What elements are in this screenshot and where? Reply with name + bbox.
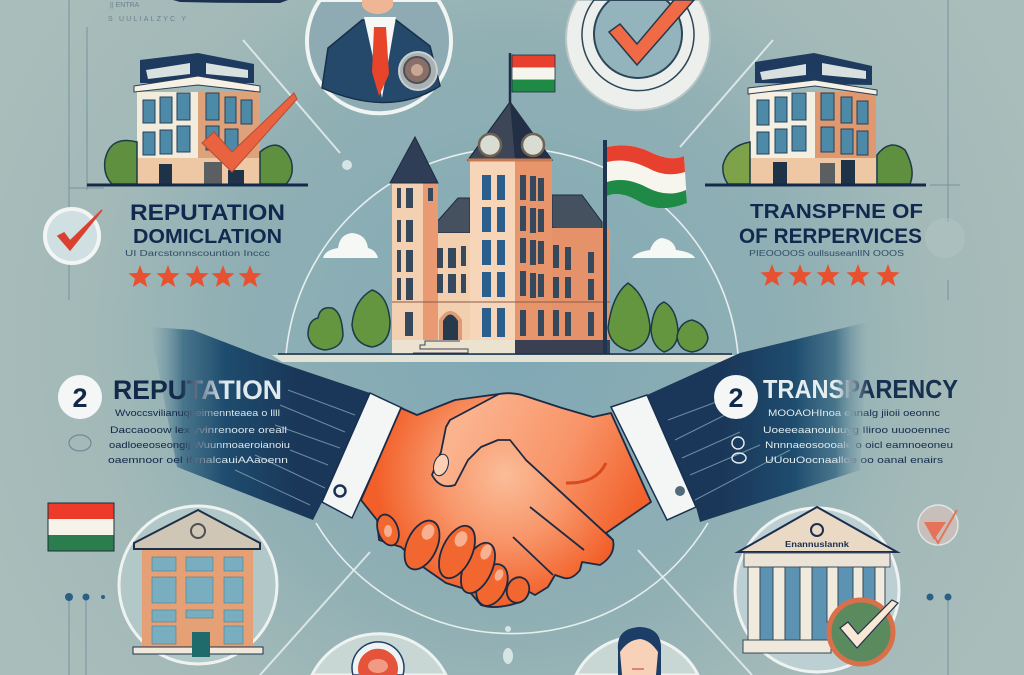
icon: left check mark xyxy=(202,93,297,172)
tower windows xyxy=(482,175,505,337)
text block: left body: oadloeeoseongij Wuunmoaeroianoiu xyxy=(109,440,290,451)
text block: left body: oaemnoor oel ifirnalcauiAAaoenn xyxy=(108,455,288,466)
entrance door xyxy=(439,311,462,340)
icons: clouds xyxy=(323,233,695,258)
left wing roof and body xyxy=(427,198,470,233)
icon: businessman portrait top xyxy=(307,0,451,113)
heading: transparency of services: TRANSPFNE OF xyxy=(750,201,923,223)
badge: number 2 right xyxy=(714,375,758,419)
text: right caption: PIEOOOOS oullsuseanlIN OOOS xyxy=(749,249,904,258)
text block: left body xyxy=(108,408,290,466)
icons: small marks lower right xyxy=(926,594,952,600)
icon: small seal lower right xyxy=(918,505,958,545)
icon: right flag on pole xyxy=(605,140,687,354)
text block: right body: MOOAOHInoa eanalg jiioii oeonnc xyxy=(768,408,940,419)
icons: small marks on right sleeve xyxy=(732,437,746,463)
icon: seal with check mark top xyxy=(566,0,710,110)
icon: right cuff xyxy=(611,395,696,520)
badge: number 2 left: 2 xyxy=(72,383,88,413)
finger nails xyxy=(384,522,505,582)
faint labels top left xyxy=(108,2,186,23)
icon: right office building xyxy=(705,53,926,185)
icon: left suit sleeve xyxy=(150,327,370,520)
icon: lower right bank: Enannuslannk xyxy=(785,540,850,549)
text block: right body: Uoeeeaanouiuuyg Iliroo uuooennec xyxy=(763,425,950,436)
text block: left body: Daccaooow lex yvinrenoore oreall xyxy=(110,425,287,436)
icon: small check badge left xyxy=(45,209,102,263)
right wing roof and body xyxy=(552,195,602,232)
ground plate xyxy=(272,354,736,362)
finger creases xyxy=(513,507,584,575)
flag on central tower xyxy=(510,53,555,104)
heading: reputation domiclation: REPUTATION xyxy=(130,200,285,225)
dots on centre axis xyxy=(342,160,513,664)
lower arc xyxy=(316,523,708,634)
heading: reputation domiclation xyxy=(130,200,285,248)
heading: reputation: REPUTATION xyxy=(113,375,282,405)
thumb nail xyxy=(431,452,451,478)
fingers xyxy=(373,512,533,611)
icon: seal bottom centre-left xyxy=(312,634,446,675)
base and steps xyxy=(515,340,610,354)
rating stars left xyxy=(128,265,262,287)
icons: central trees xyxy=(308,283,708,352)
central tower xyxy=(470,160,515,340)
icon: left cuff xyxy=(322,393,402,518)
text block: right body: UUouOocnaalloe oo oanal enairs xyxy=(765,455,943,466)
text block: right body: Nnnnaeosoooale o oicl eamnoeoneu xyxy=(765,440,953,451)
right hand with thumb xyxy=(432,393,651,540)
icon: lower right bank xyxy=(735,507,899,672)
illustration: central castle building xyxy=(390,53,610,354)
icon: left office building xyxy=(87,53,308,185)
faint labels top left: || ENTRA xyxy=(110,2,140,9)
icon: small outline left xyxy=(69,435,91,451)
faint badge right xyxy=(925,218,965,258)
panel: dome arc xyxy=(286,148,738,354)
heading: reputation domiclation: DOMICLATION xyxy=(133,226,282,248)
left hand palm xyxy=(361,394,613,607)
heading: transparency of services xyxy=(739,201,923,248)
icon: lower left building xyxy=(119,506,277,664)
icons: small marks lower left xyxy=(65,593,105,601)
heading: transparency: TRANSPARENCY xyxy=(763,374,958,404)
text: left caption: UI Darcstonnscountion Inccc xyxy=(125,249,270,258)
icon: right suit sleeve xyxy=(647,322,868,522)
faint labels top left: S UULIALZYC Y xyxy=(108,16,186,23)
badge: number 2 right: 2 xyxy=(728,383,744,413)
top left roof remnant xyxy=(173,0,288,3)
text block: left body: Wvoccsvilianuqueimennteaea o llll xyxy=(115,408,280,419)
heading: transparency of services: OF RERPERVICES xyxy=(739,225,922,248)
left tower xyxy=(392,183,423,340)
badge: number 2 left xyxy=(58,375,102,419)
text block: right body xyxy=(763,408,953,466)
icon: person bottom centre-right xyxy=(576,627,698,675)
icon: small flag lower left xyxy=(48,503,114,551)
icon: handshake xyxy=(361,393,651,611)
rating stars right xyxy=(760,264,900,286)
